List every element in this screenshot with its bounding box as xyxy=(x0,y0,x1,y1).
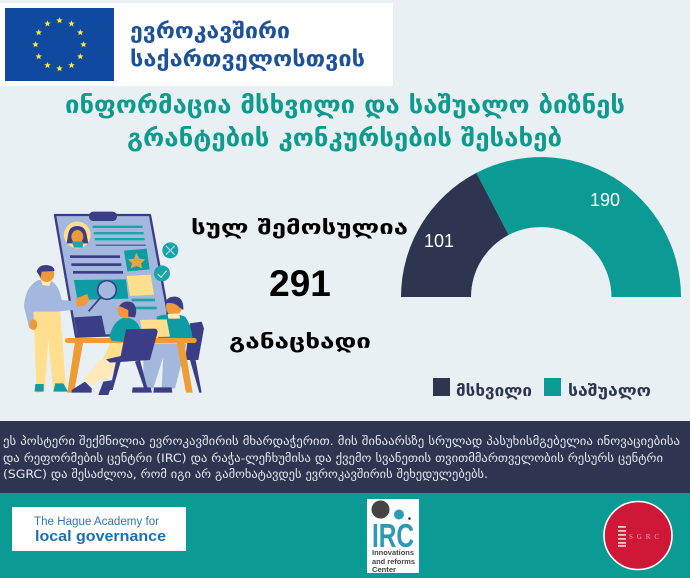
logo strip xyxy=(0,493,690,578)
value: 101: 101 xyxy=(424,231,454,251)
icon: check badge xyxy=(154,265,170,281)
table xyxy=(65,338,197,393)
disclaimer text: (SGRC) და შესაძლოა, რომ იგი არ გამოხატავდეს ევროკავშირის შეხედულებებს. xyxy=(3,467,488,481)
chart legend: საშუალო xyxy=(568,381,651,400)
title xyxy=(65,91,625,152)
icon: cross badge xyxy=(162,242,178,258)
laptop xyxy=(74,316,106,337)
logo: IRC: Innovations xyxy=(372,550,414,557)
value: 190: 190 xyxy=(590,190,620,210)
seated woman with chair xyxy=(72,302,158,395)
clipboard xyxy=(55,212,168,337)
EU logo text: საქართველოსთვის xyxy=(130,47,365,71)
disclaimer panel xyxy=(0,421,690,493)
segment: large 101 xyxy=(401,173,509,297)
logo: The Hague Academy xyxy=(12,507,186,551)
logo: The Hague Academy: local governance xyxy=(35,528,166,545)
disclaimer text xyxy=(3,434,680,481)
EU logo text xyxy=(130,19,365,71)
heading: total received: სულ შემოსულია xyxy=(191,215,408,239)
chart legend xyxy=(433,378,651,400)
icon: EU flag xyxy=(5,8,114,81)
total applications text xyxy=(191,215,408,353)
title: ინფორმაცია მსხვილი და საშუალო ბიზნეს xyxy=(65,91,625,119)
disclaimer text: ეს პოსტერი შექმნილია ევროკავშირის მხარდაჭერით. მის შინაარსზე სრულად პასუხისმგებელია ინოვაციებისა xyxy=(3,434,680,448)
illustration: team reviewing a document xyxy=(24,212,204,395)
logo: SGRC xyxy=(604,502,672,570)
title: გრანტების კონკურსების შესახებ xyxy=(127,124,562,152)
right man with chair xyxy=(132,297,204,393)
number: 291: 291 xyxy=(269,263,331,304)
logo: IRC: and reforms xyxy=(372,559,415,566)
icon: magnifying glass xyxy=(89,281,116,311)
half-donut chart xyxy=(401,157,681,297)
logo: SGRC: SGRC xyxy=(629,533,659,541)
standing man xyxy=(24,265,89,393)
logo: The Hague Academy: The Hague Academy for xyxy=(34,516,159,528)
logo: IRC: Center xyxy=(372,567,396,574)
chart legend: მსხვილი xyxy=(456,381,532,400)
label: applications: განაცხადი xyxy=(229,329,371,353)
EU logo text: ევროკავშირი xyxy=(130,19,290,43)
logo: IRC xyxy=(367,499,419,574)
disclaimer text: და რეფორმების ცენტრი (IRC) და რაჭა-ლეჩხუმისა და ქვემო სვანეთის თვითმმართველობის რესურს ცენტრი xyxy=(3,451,663,465)
segment: medium 190 xyxy=(476,157,681,297)
EU logo banner xyxy=(0,3,393,86)
logo: IRC: IRC xyxy=(372,517,414,554)
